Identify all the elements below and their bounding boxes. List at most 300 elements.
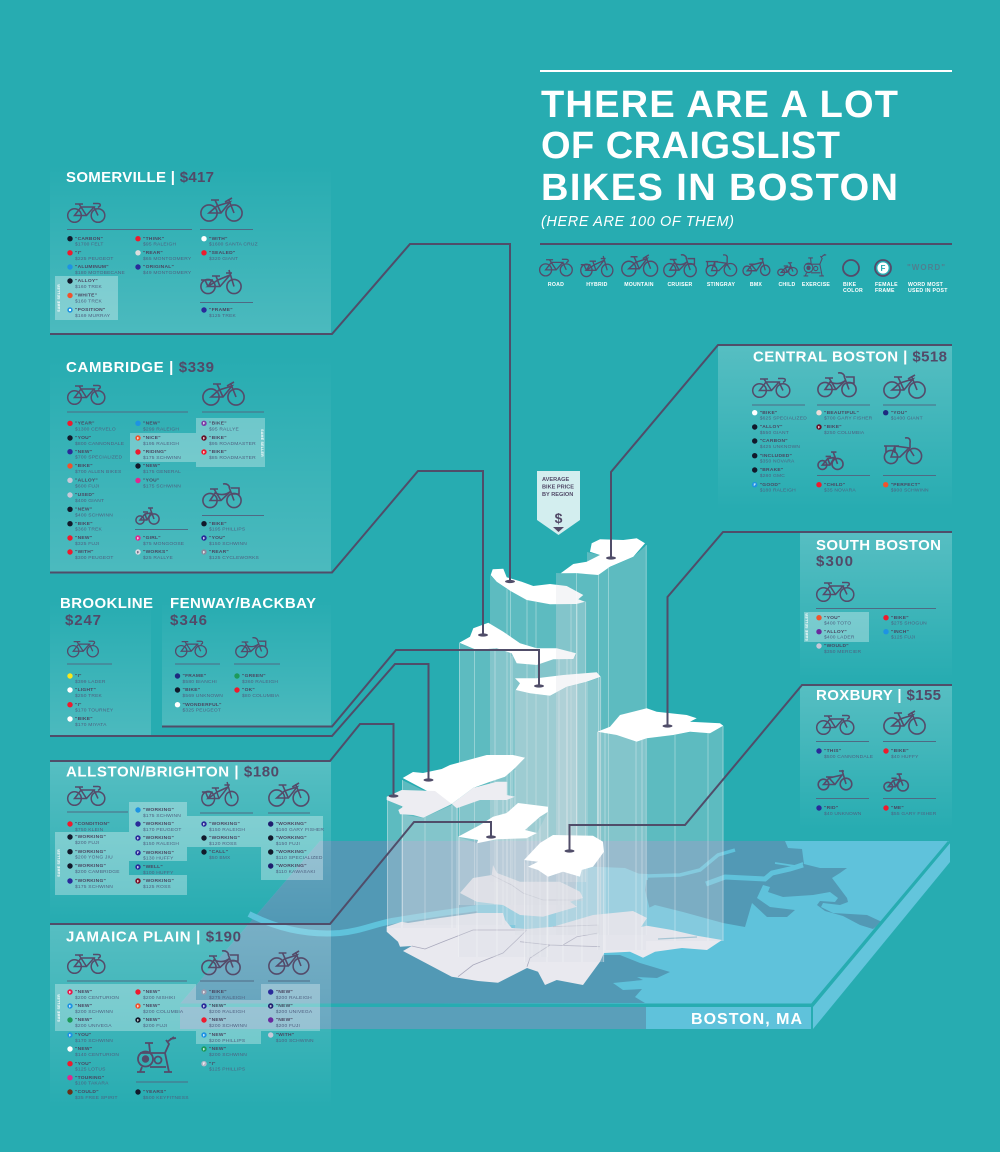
legend labels: ROAD bbox=[548, 282, 564, 288]
listings: $569 UNKNOWN bbox=[182, 693, 223, 699]
leader: Allston/Brighton bbox=[50, 724, 398, 798]
listings: $50 BMX bbox=[209, 855, 231, 861]
same-seller box bbox=[804, 612, 869, 642]
listings: F bbox=[69, 990, 72, 994]
callout: average bike price by region bbox=[537, 471, 580, 535]
heading: SOUTH BOSTON bbox=[816, 537, 941, 554]
title block bbox=[540, 70, 952, 230]
listings: $125 PHILLIPS bbox=[209, 1067, 246, 1073]
top: Cambridge bbox=[459, 623, 576, 665]
listings: $95 ROADMASTER bbox=[209, 441, 256, 447]
upper neighbourhoods bbox=[460, 865, 583, 917]
legend labels: CRUISER bbox=[667, 282, 693, 288]
listings: "NEW" bbox=[276, 989, 293, 995]
listings: $40 UNKNOWN bbox=[824, 811, 862, 817]
listings: $200 CENTURION bbox=[75, 995, 119, 1001]
listings: F bbox=[754, 483, 757, 487]
listings: "NEW" bbox=[75, 1003, 92, 1009]
listings: "BIKE" bbox=[209, 989, 227, 995]
listings: $110 SPECIALIZED bbox=[276, 855, 323, 861]
listings: $200 SCHWINN bbox=[209, 1052, 247, 1058]
listings: $320 GIANT bbox=[209, 256, 238, 262]
icon: cruiser bbox=[664, 255, 696, 277]
legend labels: HYBRID bbox=[586, 282, 608, 288]
listings: "BIKE" bbox=[75, 521, 93, 527]
listings: $95 RALEIGH bbox=[143, 242, 176, 248]
listings: $170 TOURNEY bbox=[75, 708, 114, 714]
listings: $200 FUJI bbox=[143, 1023, 167, 1029]
listings: "BIKE" bbox=[209, 435, 227, 441]
listings: "BRAKE" bbox=[760, 467, 783, 473]
listings: $180 RALEIGH bbox=[760, 488, 796, 494]
listings: $130 HUFFY bbox=[143, 856, 174, 862]
listings: "NICE" bbox=[143, 435, 161, 441]
listings: $1300 CERVELO bbox=[75, 426, 116, 432]
icon: exercise bbox=[804, 254, 826, 276]
legend labels: COLOR bbox=[843, 288, 863, 294]
listings: "YOU" bbox=[143, 478, 160, 484]
listings: $150 RALEIGH bbox=[209, 827, 245, 833]
listings: "BIKE" bbox=[209, 420, 227, 426]
listings: $175 SCHWINN bbox=[143, 455, 181, 461]
listings: "CARBON" bbox=[75, 236, 103, 242]
listings: "BIKE" bbox=[209, 521, 227, 527]
legend labels: BIKE bbox=[843, 282, 857, 288]
same-seller box: SAME SELLER bbox=[57, 284, 61, 312]
callout: average bike price by region: BY REGION bbox=[542, 492, 573, 498]
leader: Cambridge bbox=[50, 471, 488, 637]
column: Allston bbox=[387, 790, 458, 928]
listings: "ALLOY" bbox=[824, 629, 847, 635]
icon: bmx bbox=[743, 258, 770, 275]
price: $300 bbox=[816, 553, 853, 570]
listings: F bbox=[203, 436, 206, 440]
icon: female frame bbox=[875, 260, 891, 276]
listings: $200 COLUMBIA bbox=[143, 1009, 184, 1015]
listings: F bbox=[203, 1047, 206, 1051]
listings: F bbox=[203, 1004, 206, 1008]
map platform: Boston, MA bbox=[180, 841, 950, 1029]
leader: South Boston bbox=[662, 532, 952, 728]
listings: F bbox=[137, 851, 140, 855]
icon: mountain bike bbox=[884, 711, 925, 734]
same-seller box: SAME SELLER bbox=[260, 429, 264, 457]
listings: $49 MONTGOMERY bbox=[143, 270, 192, 276]
listings: $280 GMC bbox=[760, 473, 785, 479]
listings: $125 ROSS bbox=[143, 884, 171, 890]
column: Roxbury bbox=[524, 835, 604, 962]
listings: "WITH" bbox=[75, 549, 94, 555]
listings: "USED" bbox=[75, 492, 95, 498]
map label: BOSTON, MA bbox=[691, 1011, 802, 1028]
listings: $400 LADER bbox=[824, 635, 855, 641]
same-seller boxes bbox=[55, 984, 320, 1044]
map top surface: water bbox=[180, 841, 949, 1004]
same-seller boxes: SAME SELLER bbox=[57, 994, 61, 1022]
listings: "THIS" bbox=[824, 748, 841, 754]
listings bbox=[816, 615, 927, 655]
icon: cruiser bike bbox=[818, 373, 856, 397]
listings: $150 RALEIGH bbox=[143, 841, 179, 847]
top: Somerville bbox=[491, 569, 585, 604]
legend bbox=[540, 243, 952, 294]
listings: $75 MONGOOSE bbox=[143, 541, 185, 547]
listings: $100 TAKARA bbox=[75, 1081, 109, 1087]
listings: "LIGHT" bbox=[75, 687, 96, 693]
heading: FENWAY/BACKBAY bbox=[170, 595, 316, 612]
listings: "NEW" bbox=[143, 420, 160, 426]
listings: $325 FUJI bbox=[75, 541, 99, 547]
listings: "COULD" bbox=[75, 1089, 99, 1095]
listings: F bbox=[137, 536, 140, 540]
listings: "GREEN" bbox=[242, 673, 266, 679]
listings: "WORKING" bbox=[209, 835, 240, 841]
listings: F bbox=[137, 836, 140, 840]
listings: $900 SCHWINN bbox=[891, 488, 929, 494]
column: Brighton bbox=[402, 755, 525, 925]
listings: "NEW" bbox=[209, 1003, 226, 1009]
listings: $350 NOVARA bbox=[760, 459, 795, 465]
panel: South Boston bbox=[800, 532, 952, 680]
listings: $55 GARY FISHER bbox=[891, 811, 937, 817]
listings: F bbox=[137, 436, 140, 440]
listings: $250 COLUMBIA bbox=[824, 430, 865, 436]
listings: $140 CENTURION bbox=[75, 1052, 119, 1058]
listings: "WORKING" bbox=[143, 835, 174, 841]
listings bbox=[752, 410, 929, 494]
top: Brighton bbox=[403, 755, 525, 804]
listings: $200 UNIVEGA bbox=[276, 1009, 313, 1015]
listings bbox=[67, 420, 260, 561]
listings: $200 NISHIKI bbox=[143, 995, 175, 1001]
listings: "NEW" bbox=[209, 1032, 226, 1038]
icon: mountain bike bbox=[201, 198, 242, 221]
column: Central Boston bbox=[556, 538, 647, 935]
icon: road bike bbox=[68, 386, 105, 404]
listings: "WORKS" bbox=[143, 549, 168, 555]
lower neighbourhoods bbox=[387, 911, 722, 985]
listings: "NEW" bbox=[209, 1046, 226, 1052]
listings: $399 LADER bbox=[75, 679, 106, 685]
listings: "POSITION" bbox=[75, 307, 106, 313]
callout: average bike price by region: $ bbox=[555, 510, 563, 526]
listings: "GIRL" bbox=[143, 535, 161, 541]
listings: $180 MOTOBECANE bbox=[75, 270, 125, 276]
listings: "REAR" bbox=[209, 549, 229, 555]
listings: F bbox=[137, 1004, 140, 1008]
listings bbox=[67, 807, 324, 890]
icon: cruiser bike bbox=[202, 951, 240, 975]
listings: "ALLOY" bbox=[760, 424, 783, 430]
legend labels: FEMALE bbox=[875, 282, 898, 288]
icon: mountain bbox=[622, 255, 658, 276]
title block: OF CRAIGSLIST bbox=[541, 125, 840, 167]
listings: "INCLUDED" bbox=[760, 453, 792, 459]
listings: F bbox=[203, 990, 206, 994]
listings: "WORKING" bbox=[276, 835, 307, 841]
icon: mountain bike bbox=[884, 375, 925, 398]
listings: "I" bbox=[75, 702, 82, 708]
listings: "CARBON" bbox=[760, 438, 788, 444]
top: Brighton underside bbox=[452, 782, 515, 808]
legend labels: WORD MOST bbox=[908, 282, 944, 288]
price: $247 bbox=[65, 612, 101, 629]
listings: $160 GARY FISHER bbox=[276, 827, 324, 833]
listings: "NEW" bbox=[75, 449, 92, 455]
icon: road bike bbox=[68, 204, 105, 222]
listings: $175 SCHWINN bbox=[143, 813, 181, 819]
listings: "BIKE" bbox=[209, 449, 227, 455]
listings: "WORKING" bbox=[75, 849, 106, 855]
listings: F bbox=[203, 1062, 206, 1066]
listings: F bbox=[818, 425, 821, 429]
same-seller box: SAME SELLER bbox=[805, 613, 809, 641]
icon: road bike bbox=[68, 786, 105, 805]
heading: ALLSTON/BRIGHTON | $180 bbox=[66, 764, 279, 781]
top: Central Boston bbox=[561, 538, 645, 575]
heading: CENTRAL BOSTON | $518 bbox=[753, 349, 947, 366]
listings: "YOU" bbox=[75, 1061, 92, 1067]
same-seller boxes bbox=[55, 802, 323, 895]
listings: $700 ALLEN BIKES bbox=[75, 469, 122, 475]
listings: "BIKE" bbox=[760, 410, 778, 416]
listings: "BIKE" bbox=[891, 748, 909, 754]
listings: F bbox=[69, 1004, 72, 1008]
listings bbox=[816, 748, 937, 817]
icon: road bike bbox=[817, 716, 854, 734]
listings bbox=[67, 236, 258, 319]
listings: "NEW" bbox=[143, 463, 160, 469]
listings: $125 CYCLEWORKS bbox=[209, 555, 260, 561]
listings: $85 ROADMASTER bbox=[209, 455, 256, 461]
icon: cruiser bike bbox=[203, 484, 241, 508]
listings: "WORKING" bbox=[276, 849, 307, 855]
title rule bbox=[540, 70, 952, 72]
listings: $600 FUJI bbox=[75, 483, 99, 489]
listings: "YOU" bbox=[75, 1032, 92, 1038]
listings: $800 CANNONDALE bbox=[75, 441, 125, 447]
listings: "GOOD" bbox=[760, 482, 781, 488]
listings: "YOU" bbox=[75, 435, 92, 441]
icon: road bike bbox=[68, 641, 98, 657]
base neighbourhood map bbox=[387, 865, 722, 985]
pier channel bbox=[658, 937, 697, 939]
heading: BROOKLINE bbox=[60, 595, 153, 612]
listings: $200 RALEIGH bbox=[276, 995, 312, 1001]
listings: "WORKING" bbox=[209, 821, 240, 827]
panel: Allston/Brighton bbox=[50, 761, 331, 920]
listings: "WITH" bbox=[276, 1032, 294, 1038]
listings: $125 LOTUS bbox=[75, 1067, 106, 1073]
listings: F bbox=[137, 879, 140, 883]
legend labels: BMX bbox=[750, 282, 762, 288]
callout: average bike price by region: BIKE PRICE bbox=[542, 484, 574, 490]
legend labels: USED IN POST bbox=[908, 288, 948, 294]
leader: Roxbury bbox=[564, 685, 952, 853]
listings: $170 PEUGEOT bbox=[143, 827, 182, 833]
icon: stingray bbox=[706, 255, 737, 276]
icon: hybrid bbox=[581, 256, 613, 277]
icon: mountain bike bbox=[269, 783, 309, 806]
listings: $200 FUJI bbox=[276, 1023, 300, 1029]
inner harbour water bbox=[475, 866, 650, 932]
listings: $325 PEUGEOT bbox=[182, 708, 221, 714]
top: South Boston bbox=[597, 708, 723, 742]
listings: "ALUMINUM" bbox=[75, 264, 109, 270]
listings: $160 TREK bbox=[75, 298, 103, 304]
listings: "WORKING" bbox=[276, 821, 307, 827]
listings bbox=[175, 673, 280, 714]
map right face bbox=[813, 843, 950, 1029]
listings: $150 SCHWINN bbox=[209, 541, 247, 547]
listings: "WORKING" bbox=[75, 863, 106, 869]
listings: "WELL" bbox=[143, 864, 163, 870]
listings: "CONDITION" bbox=[75, 821, 110, 827]
icon: road bike bbox=[753, 378, 790, 397]
listings: F bbox=[137, 550, 140, 554]
listings: $625 SPECIALIZED bbox=[760, 416, 807, 422]
legend labels: EXERCISE bbox=[802, 282, 830, 288]
listings: "NEW" bbox=[143, 1017, 160, 1023]
listings: "ORIGINAL" bbox=[143, 264, 174, 270]
listings: $200 SCHWINN bbox=[209, 1023, 247, 1029]
listings: "REAR" bbox=[143, 250, 163, 256]
icon: cruiser bike bbox=[236, 638, 267, 657]
listings: $175 SCHWINN bbox=[75, 884, 113, 890]
icon: child bbox=[778, 263, 797, 276]
listings: $400 GIANT bbox=[75, 498, 104, 504]
listings: $200 YONG JIU bbox=[75, 855, 113, 861]
listings: "YOU" bbox=[824, 615, 840, 621]
map land mass bbox=[180, 841, 882, 1004]
column: Somerville bbox=[490, 569, 586, 882]
listings: $300 PEUGEOT bbox=[75, 555, 114, 561]
listings: F bbox=[203, 550, 206, 554]
listings: "SEALED" bbox=[209, 250, 235, 256]
leader: Brookline bbox=[50, 664, 434, 782]
listings: "WONDERFUL" bbox=[182, 702, 222, 708]
listings: $125 FUJI bbox=[891, 635, 915, 641]
listings: "NEW" bbox=[143, 1003, 160, 1009]
listings: "THINK" bbox=[143, 236, 164, 242]
listings: $299 RALEIGH bbox=[143, 426, 179, 432]
listings: "NEW" bbox=[75, 1046, 92, 1052]
icon: bmx bike bbox=[818, 770, 852, 790]
icon: mountain bike bbox=[203, 382, 244, 405]
listings: "BIKE" bbox=[824, 424, 842, 430]
listings: F bbox=[69, 1033, 72, 1037]
map front face bbox=[180, 1007, 646, 1029]
listings: "NEW" bbox=[276, 1017, 293, 1023]
listings: "I" bbox=[209, 1061, 216, 1067]
icon: exercise bike bbox=[137, 1037, 176, 1072]
listings: F bbox=[203, 822, 206, 826]
icon: bike colour bbox=[843, 260, 859, 276]
panel: Central Boston bbox=[718, 345, 952, 510]
listings: $200 UNIVEGA bbox=[75, 1023, 112, 1029]
icon: stingray bike bbox=[884, 438, 922, 464]
listings: $275 RALEIGH bbox=[209, 995, 245, 1001]
listings: "BIKE" bbox=[182, 687, 200, 693]
listings: $95 RALLYE bbox=[209, 426, 239, 432]
column: Cambridge bbox=[459, 623, 577, 905]
listings: $225 PEUGEOT bbox=[75, 256, 114, 262]
listings: F bbox=[203, 450, 206, 454]
listings: "NEW" bbox=[75, 535, 92, 541]
same-seller boxes: SAME SELLER bbox=[57, 849, 61, 877]
listings: "ME" bbox=[891, 805, 904, 811]
legend labels: FRAME bbox=[875, 288, 895, 294]
heading: CAMBRIDGE | $339 bbox=[66, 359, 214, 376]
top: Fenway/Backbay bbox=[515, 672, 601, 696]
listings: $170 SCHWINN bbox=[75, 1038, 113, 1044]
listings: $550 GIANT bbox=[760, 430, 789, 436]
icon: hybrid bike bbox=[202, 782, 238, 806]
legend labels: CHILD bbox=[778, 282, 796, 288]
listings: F bbox=[270, 1004, 273, 1008]
listings bbox=[67, 673, 114, 728]
listings: "NEW" bbox=[143, 989, 160, 995]
panel: Cambridge bbox=[50, 355, 331, 572]
listings: $175 GENERAL bbox=[143, 469, 181, 475]
listings: "I" bbox=[75, 250, 82, 256]
listings: "CHILD" bbox=[824, 482, 845, 488]
listings: $150 FUJI bbox=[276, 841, 300, 847]
listings: "WORKING" bbox=[143, 807, 174, 813]
listings: $1700 FELT bbox=[75, 242, 104, 248]
listings: "NEW" bbox=[75, 506, 92, 512]
listings: "PERFECT" bbox=[891, 482, 920, 488]
listings: "NEW" bbox=[209, 1017, 226, 1023]
listings: "NEW" bbox=[75, 1017, 92, 1023]
listings: "WORKING" bbox=[75, 878, 106, 884]
listings: "WORKING" bbox=[143, 878, 174, 884]
panel: Brookline bbox=[50, 595, 153, 736]
panel: Jamaica Plain bbox=[50, 924, 331, 1108]
top: Roxbury bbox=[524, 835, 604, 877]
listings: $425 UNKNOWN bbox=[760, 444, 800, 450]
listings: "YEARS" bbox=[143, 1089, 166, 1095]
price: $346 bbox=[170, 612, 207, 629]
listings: $200 SCHWINN bbox=[75, 1009, 113, 1015]
icon: child bike bbox=[818, 452, 843, 469]
listings: "NEW" bbox=[276, 1003, 293, 1009]
callout: average bike price by region: AVERAGE bbox=[542, 477, 570, 483]
heading: SOMERVILLE | $417 bbox=[66, 169, 214, 186]
listings: $350 MERCIER bbox=[824, 649, 861, 655]
listings: "BIKE" bbox=[75, 716, 93, 722]
listings: $400 TOTO bbox=[824, 621, 851, 627]
listings: "CALL" bbox=[209, 849, 228, 855]
listings: "YEAR" bbox=[75, 420, 95, 426]
map edges bbox=[180, 842, 949, 1005]
column: Fenway/Backbay bbox=[515, 672, 601, 935]
listings: "WITH" bbox=[209, 236, 228, 242]
title: THERE ARE A LOT bbox=[541, 84, 898, 126]
listings: $120 ROSS bbox=[209, 841, 237, 847]
listings: $125 TREK bbox=[209, 313, 237, 319]
listings: "WORKING" bbox=[143, 850, 174, 856]
listings: $1600 SANTA CRUZ bbox=[209, 242, 258, 248]
listings: $35 FREE SPIRIT bbox=[75, 1095, 118, 1101]
listings: F bbox=[203, 422, 206, 426]
listings: "WORKING" bbox=[276, 863, 307, 869]
listings: "ALLOY" bbox=[75, 278, 98, 284]
listings: "I" bbox=[75, 673, 82, 679]
listings: F bbox=[203, 536, 206, 540]
icon: road bike bbox=[817, 582, 854, 601]
legend labels: MOUNTAIN bbox=[624, 282, 654, 288]
